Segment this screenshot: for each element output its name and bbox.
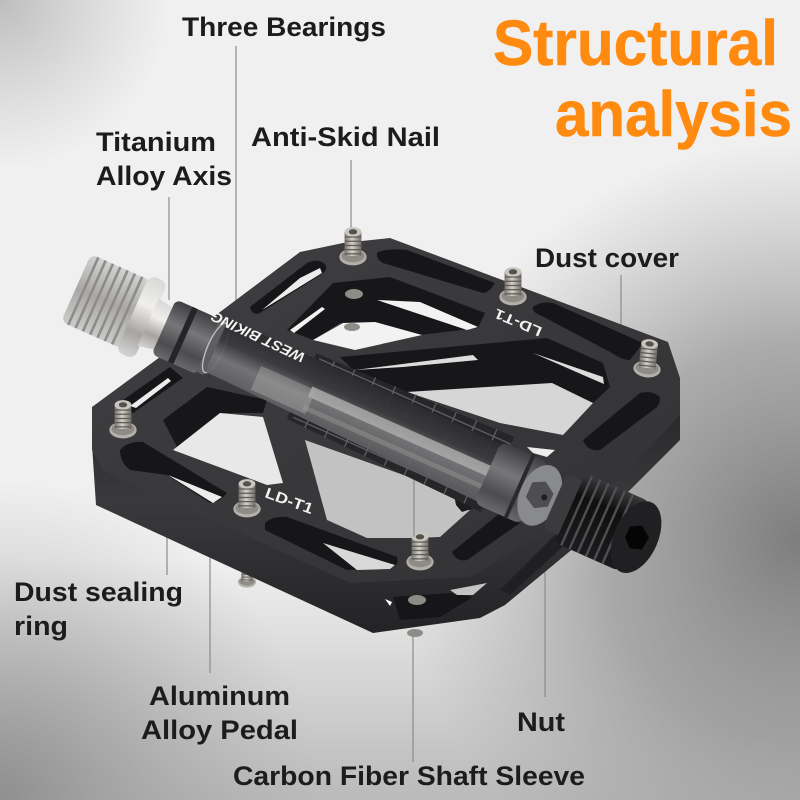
threaded end <box>61 254 151 348</box>
label: nut: Nut <box>517 707 565 737</box>
shaft assembly <box>59 249 673 584</box>
anti-skid screws <box>109 227 664 570</box>
label: carbon fiber shaft sleeve: Carbon Fiber Shaft Sleeve <box>233 761 585 791</box>
title: Structural <box>493 7 778 79</box>
label: titanium alloy axis: Titanium <box>96 127 216 157</box>
label: dust sealing ring: ring <box>14 611 68 641</box>
label: anti-skid nail: Anti-Skid Nail <box>251 122 440 152</box>
model mark: upper: LD-T1 <box>492 306 544 340</box>
end collar <box>473 440 572 535</box>
label: dust sealing ring: Dust sealing <box>14 577 183 607</box>
label: aluminum alloy pedal <box>141 681 298 745</box>
slots <box>120 249 660 620</box>
bearing collar <box>152 299 234 380</box>
transparent sleeve <box>202 319 506 503</box>
label: titanium alloy axis <box>96 127 232 191</box>
upper cavity <box>287 277 485 340</box>
model mark: lower: LD-T1 <box>263 485 315 518</box>
right openings <box>355 353 604 435</box>
label: dust cover: Dust cover <box>535 243 679 273</box>
spring washer <box>543 474 591 539</box>
left cavity <box>163 387 267 447</box>
silver spindle hub <box>116 275 184 367</box>
label: aluminum alloy pedal: Alloy Pedal <box>141 715 298 745</box>
slot highlights <box>130 268 555 606</box>
leader lines <box>167 46 621 762</box>
pedal body <box>92 227 680 637</box>
leader line: shaft sleeve over opening <box>413 478 415 537</box>
upper openings <box>290 300 478 350</box>
pedal side wall <box>92 410 680 633</box>
block under shaft end <box>452 485 497 512</box>
under-side screw <box>238 562 256 588</box>
screw small heads <box>344 289 426 637</box>
center-front opening <box>305 440 470 538</box>
carbon inner tube <box>284 350 514 512</box>
label: three bearings: Three Bearings <box>182 12 386 42</box>
pedal top plate <box>92 238 680 583</box>
brand mark: WEST BIKING <box>208 308 307 366</box>
title <box>493 7 792 150</box>
right cavity <box>340 338 610 403</box>
black nut <box>555 473 672 581</box>
label: aluminum alloy pedal: Aluminum <box>149 681 290 711</box>
label: titanium alloy axis: Alloy Axis <box>96 161 232 191</box>
left opening <box>173 413 283 485</box>
label: dust sealing ring <box>14 577 183 641</box>
